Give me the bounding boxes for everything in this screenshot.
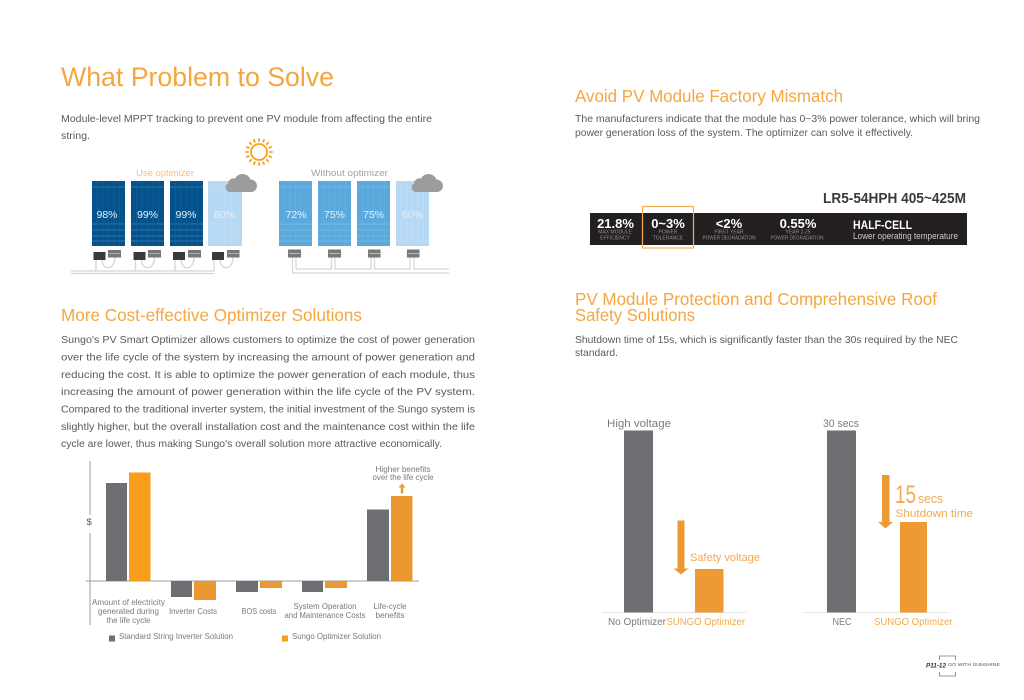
body paragraph: shutdown: standard. [575, 347, 618, 359]
category labels [92, 598, 407, 625]
spec: yearly degradation: 0.55% [780, 216, 817, 231]
icon: sun [246, 139, 272, 165]
spec: half-cell [853, 218, 958, 241]
label: 15 secs shutdown time: 15 [895, 481, 916, 509]
axis labels: NEC [832, 617, 852, 628]
panels without optimizer: 75% [324, 209, 345, 221]
category labels: Life-cycle [374, 602, 407, 611]
spec: first year degradation: FIRST YEAR [714, 230, 744, 236]
arrow: down [878, 475, 893, 528]
intro paragraph: Module-level MPPT tracking to prevent one PV module from affecting the entire [61, 113, 432, 125]
axes [86, 461, 419, 625]
heading: roof safety: Safety Solutions [575, 305, 695, 325]
body paragraph: factory mismatch: The manufacturers indicate that the module has 0~3% power tolerance, which will bring [575, 113, 980, 125]
spec: first year degradation: POWER DEGRADATION [702, 236, 756, 242]
intro paragraph: string. [61, 130, 90, 142]
bar chart: shutdown time [803, 418, 973, 628]
heading: roof safety: PV Module Protection and Comprehensive Roof [575, 289, 937, 309]
axis labels: SUNGO Optimizer [874, 617, 953, 628]
bar chart: life-cycle cost [86, 461, 434, 642]
spec: efficiency [597, 216, 634, 242]
footer: page mark [926, 656, 1000, 676]
panels with optimizer: 99% [175, 209, 197, 221]
spec: efficiency: EFFICIENCY [600, 236, 631, 242]
diagram: PV string comparison [71, 139, 449, 274]
model name: LR5-54HPH 405~425M [823, 190, 966, 207]
body paragraph: factory mismatch [575, 113, 980, 139]
spec: yearly degradation: YEAR 2-25 [785, 230, 811, 236]
panels without optimizer: 72% [285, 209, 307, 221]
footer: page mark: GO WITH SUNSHINE [948, 662, 1000, 667]
axis labels: SUNGO Optimizer [666, 617, 746, 628]
body paragraph: cost-effective: Compared to the traditional inverter system, the initial investment of the Sungo system is [61, 404, 475, 416]
spec: efficiency: 21.8% [597, 216, 634, 231]
panels with optimizer: 99% [137, 209, 158, 221]
body paragraph: shutdown: Shutdown time of 15s, which is significantly faster than the 30s required by the NEC [575, 334, 958, 346]
callout: higher benefits [372, 465, 434, 494]
category labels: generated during [98, 607, 159, 616]
label: 15 secs shutdown time [895, 481, 973, 520]
axis labels [832, 617, 953, 628]
callout: higher benefits: Higher benefits [376, 465, 430, 474]
body paragraph: factory mismatch: power generation loss of the system. The optimizer can solve it effectively. [575, 127, 913, 139]
label: 15 secs shutdown time: Shutdown time [896, 508, 973, 520]
category labels: BOS costs [242, 607, 276, 616]
axis labels: No Optimizer [608, 617, 667, 628]
category labels: Amount of electricity [92, 598, 165, 607]
orange bars [129, 472, 412, 600]
spec: yearly degradation [770, 216, 824, 242]
spec: power tolerance: TOLERANCE [653, 236, 684, 242]
axis labels [608, 617, 746, 628]
category labels: and Maintenance Costs [284, 611, 366, 620]
dark band [590, 213, 967, 245]
heading: cost-effective: More Cost-effective Optimizer Solutions [61, 305, 362, 325]
label: use optimizer: Use optimizer [136, 168, 194, 179]
body paragraph: cost-effective: cycle are lower, thus making Sungo's overall solution more attractive economically. [61, 438, 442, 450]
panels without optimizer [279, 181, 429, 246]
body paragraph: cost-effective: over the life cycle of the system by increasing the amount of power generation and [61, 352, 475, 364]
axis label: $ [86, 517, 92, 528]
footer: page mark: P11-12 [926, 664, 947, 670]
icon: cloud right [412, 174, 443, 192]
icon: cloud left [226, 174, 257, 192]
spec: power tolerance: POWER [659, 230, 678, 236]
heading: roof safety [575, 289, 937, 325]
spec: first year degradation: <2% [716, 216, 743, 231]
label: without optimizer: Without optimizer [311, 168, 388, 179]
category labels: System Operation [294, 602, 356, 611]
bar: sungo optimizer [695, 569, 724, 612]
title: What Problem to Solve [61, 62, 334, 92]
body paragraph: cost-effective: Sungo's PV Smart Optimizer allows customers to optimize the cost of power generation [61, 334, 475, 346]
highlight box [642, 206, 694, 248]
category labels: the life cycle [106, 616, 151, 625]
spec: half-cell: HALF-CELL [853, 218, 912, 232]
bar chart: voltage [602, 418, 760, 628]
category labels: benefits [376, 611, 404, 620]
label: safety voltage: Safety voltage [690, 552, 760, 564]
legend [109, 632, 381, 642]
panels with optimizer: 98% [96, 209, 118, 221]
label: 15 secs shutdown time: secs [918, 491, 943, 506]
legend: Sungo Optimizer Solution [292, 632, 381, 641]
bar: sungo optimizer [900, 522, 927, 612]
label: high voltage: High voltage [607, 418, 671, 430]
intro paragraph [61, 113, 432, 142]
bar: no optimizer [624, 430, 653, 612]
body paragraph: shutdown [575, 334, 958, 359]
heading: factory mismatch: Avoid PV Module Factory Mismatch [575, 86, 843, 106]
label: 30 secs: 30 secs [823, 418, 859, 430]
bar: NEC [827, 430, 856, 612]
gray bars [106, 483, 389, 597]
panels without optimizer: 75% [363, 209, 384, 221]
legend: Standard String Inverter Solution [119, 632, 233, 641]
panels without optimizer: 60% [402, 209, 423, 221]
optimizers and cabling, left string [71, 250, 240, 274]
body paragraph: cost-effective: reducing the cost. It is able to optimize the power generation of each module, thus [61, 369, 475, 381]
panels with optimizer: 60% [214, 209, 235, 221]
spec: first year degradation [702, 216, 756, 242]
body paragraph: cost-effective [61, 334, 475, 450]
spec: power tolerance [651, 216, 685, 242]
arrow: down [674, 520, 688, 574]
panels with optimizer [92, 181, 242, 246]
spec: half-cell: Lower operating temperature [853, 231, 958, 241]
spec: efficiency: MAX MODULE [598, 230, 632, 236]
body paragraph: cost-effective: slightly higher, but the overall installation cost and the maintenance cost within the life [61, 421, 475, 433]
spec: power tolerance: 0~3% [651, 216, 685, 231]
module spec strip [590, 190, 967, 248]
category labels: Inverter Costs [169, 607, 217, 616]
callout: higher benefits: over the life cycle [372, 473, 434, 482]
spec: yearly degradation: POWER DEGRADATION [770, 236, 824, 242]
body paragraph: cost-effective: increasing the amount of power generation within the life cycle of the PV system. [61, 386, 475, 398]
inverters and cabling, right string [288, 250, 449, 273]
